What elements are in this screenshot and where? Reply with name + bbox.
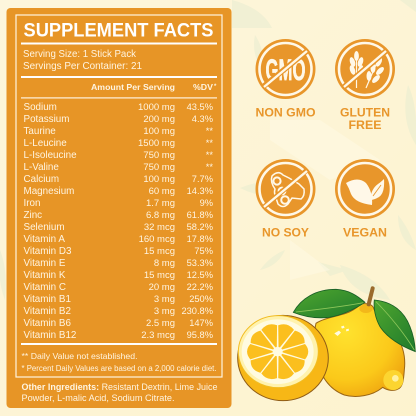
nutrient rows: 15 mcg [144,246,175,257]
footnotes: ** Daily Value not established. [22,351,138,361]
nutrient rows: Vitamin A [24,234,65,245]
nutrient rows: 750 mg [143,150,175,161]
badge: non gmo: GMO [266,54,306,87]
nutrient rows: 9% [200,198,213,208]
nutrient rows: Vitamin C [24,282,66,293]
nutrient rows: Magnesium [24,186,74,197]
label: gluten free: GLUTEN [340,106,390,120]
nutrient rows: Vitamin B12 [24,330,76,341]
nutrient rows: ** [206,138,213,148]
label: no soy: NO SOY [262,226,309,240]
nutrient rows: 12.5% [187,270,213,280]
nutrient rows: 14.3% [187,186,213,196]
nutrient rows: Vitamin K [24,270,66,281]
nutrient rows: 75% [194,246,213,256]
serving info: Serving Size: 1 Stick Pack [23,49,136,60]
nutrient rows: 53.3% [187,258,213,268]
nutrient rows: ** [206,126,213,136]
nutrient rows: 2.5 mg [146,318,175,329]
nutrient rows: 4.3% [192,114,213,124]
other ingredients: Powder, L-malic Acid, Sodium Citrate. [22,393,174,403]
nutrient rows: 750 mg [143,162,175,173]
nutrient rows: L-Valine [24,162,59,173]
nutrient rows: Vitamin B1 [24,294,71,305]
nutrient rows: 1000 mg [138,102,175,113]
nutrient rows: Vitamin B2 [24,306,71,317]
stem [369,288,373,304]
badge: non gmo [256,39,316,99]
nutrient rows: Vitamin B6 [24,318,71,329]
nutrient rows: 60 mg [149,186,175,197]
nutrient rows: 100 mg [143,126,175,137]
footnotes [22,351,216,373]
nutrient rows: 22.2% [187,282,213,292]
nutrient rows: Zinc [24,210,42,221]
nutrient rows: L-Isoleucine [24,150,77,161]
nutrient rows: Iron [24,198,40,209]
nutrient rows: 17.8% [187,234,213,244]
other ingredients [22,382,218,403]
nutrient rows: Sodium [24,102,57,113]
nutrient rows: 95.8% [187,330,213,340]
label: non gmo: NON GMO [256,106,316,120]
nutrient rows: 7.7% [192,174,213,184]
nutrient rows: Taurine [24,126,56,137]
nutrient rows: 3 mg [154,294,175,305]
nutrient rows: L-Leucine [24,138,67,149]
other ingredients: Other Ingredients: Resistant Dextrin, Lime Juice [22,382,218,392]
right leaf [374,300,415,352]
title: SUPPLEMENT FACTS [24,20,214,42]
label: gluten free: FREE [348,119,382,132]
nutrient rows: 1500 mg [138,138,175,149]
label: gluten free [340,106,390,132]
nutrient rows [24,102,213,341]
left leaf [293,289,365,318]
nutrient rows: 147% [189,318,213,328]
footnotes: * Percent Daily Values are based on a 2,000 calorie diet. [22,364,216,373]
whole lemon [314,304,405,396]
nutrient rows: 32 mcg [144,222,175,233]
table header [91,82,217,92]
nutrient rows: ** [206,162,213,172]
nutrient rows: 1.7 mg [146,198,175,209]
nutrient rows: Selenium [24,222,65,233]
nutrient rows: 8 mg [154,258,175,269]
nutrient rows: 100 mg [143,174,175,185]
nutrient rows: 6.8 mg [146,210,175,221]
nutrient rows: 15 mcg [144,270,175,281]
table header: %DV [193,82,213,92]
nutrient rows: 58.2% [187,222,213,232]
serving info [23,49,142,72]
nutrient rows: ** [206,150,213,160]
label: vegan: VEGAN [343,226,387,240]
panel: supplement facts [6,8,232,408]
table header: * [214,84,217,90]
half lemon [238,315,328,401]
nutrient rows: 3 mg [154,306,175,317]
nutrient rows: Calcium [24,174,59,185]
badge: gluten free [335,39,395,99]
illustration: lemons [238,288,415,401]
nutrient rows: 61.8% [187,210,213,220]
nutrient rows: Vitamin E [24,258,66,269]
nutrient rows: 200 mg [143,114,175,125]
badge: no soy [256,159,316,219]
nutrient rows: 2.3 mcg [141,330,175,341]
nutrient rows: 250% [189,294,213,304]
nutrient rows: 20 mg [149,282,175,293]
nutrient rows: Vitamin D3 [24,246,72,257]
nutrient rows: Potassium [24,114,69,125]
nutrient rows: 230.8% [181,306,213,316]
serving info: Servings Per Container: 21 [23,61,142,72]
nutrient rows: 43.5% [187,102,213,112]
badge: vegan [335,159,395,219]
nutrient rows: 160 mcg [139,234,175,245]
table header: Amount Per Serving [91,82,175,92]
